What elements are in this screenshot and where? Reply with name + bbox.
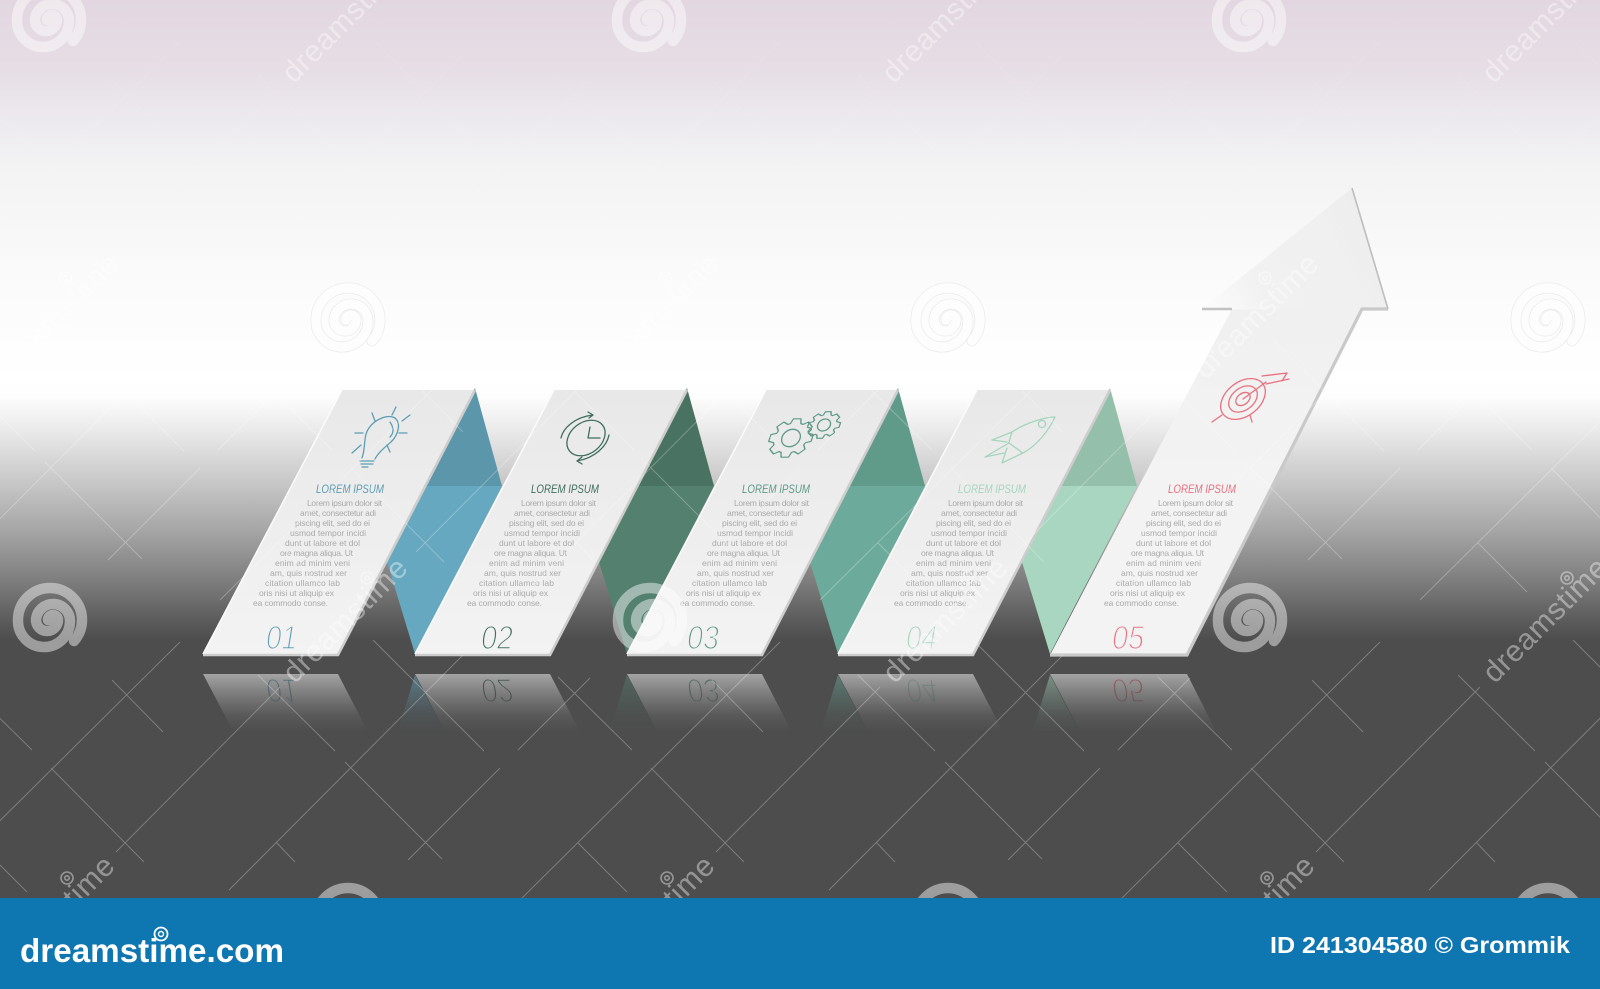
body text: ea commodo conse.: [894, 598, 969, 608]
body text: amet, consectetur adi: [1151, 508, 1227, 518]
body text: piscing elit, sed do ei: [722, 518, 797, 528]
image id and credit: ID 241304580 © Grommik: [1270, 932, 1571, 958]
body text: amet, consectetur adi: [300, 508, 376, 518]
body text: oris nisi ut aliquip ex: [1110, 588, 1186, 598]
body text: citation ullamco lab: [692, 578, 767, 588]
fold: teal: [387, 388, 502, 654]
body text: [1104, 498, 1234, 608]
body text: oris nisi ut aliquip ex: [259, 588, 335, 598]
body text: ea commodo conse.: [680, 598, 755, 608]
body text: enim ad minim veni: [275, 558, 350, 568]
heading: LOREM IPSUM: [1168, 484, 1236, 496]
body text: ea commodo conse.: [467, 598, 542, 608]
body text: citation ullamco lab: [265, 578, 340, 588]
body text: enim ad minim veni: [916, 558, 991, 568]
fold: dark green: [599, 388, 714, 654]
body text: Lorem ipsum dolor sit: [734, 498, 810, 508]
body text: ore magna aliqua. Ut: [1131, 548, 1205, 558]
body text: oris nisi ut aliquip ex: [900, 588, 976, 598]
number 01: 01: [266, 619, 297, 656]
heading: LOREM IPSUM: [531, 484, 599, 496]
icon: rocket: [985, 417, 1055, 463]
watermark overlay: dreamstime: [587, 247, 725, 385]
body text: ore magna aliqua. Ut: [921, 548, 995, 558]
watermark overlay: dreamstime: [276, 551, 414, 689]
body text: am, quis nostrud xer: [697, 568, 774, 578]
body text: oris nisi ut aliquip ex: [473, 588, 549, 598]
body text: ore magna aliqua. Ut: [494, 548, 568, 558]
reflections on the floor: 03: [687, 672, 720, 709]
body text: dunt ut labore et dol: [499, 538, 574, 548]
body text: amet, consectetur adi: [514, 508, 590, 518]
panel: step 05 arrow: [1050, 188, 1388, 656]
reflections on the floor: 05: [1112, 672, 1145, 709]
fold: mid green: [810, 388, 925, 654]
watermark overlay: dreamstime: [1187, 247, 1325, 385]
reflections on the floor: [203, 674, 1210, 720]
watermark overlay: dreamstime: [876, 551, 1014, 689]
body text: piscing elit, sed do ei: [295, 518, 370, 528]
body text: amet, consectetur adi: [941, 508, 1017, 518]
body text: Lorem ipsum dolor sit: [307, 498, 383, 508]
body text: usmod tempor incidi: [931, 528, 1007, 538]
body text: piscing elit, sed do ei: [1146, 518, 1221, 528]
body text: piscing elit, sed do ei: [509, 518, 584, 528]
body text: oris nisi ut aliquip ex: [686, 588, 762, 598]
body text: usmod tempor incidi: [290, 528, 366, 538]
watermark overlay: dreamstime: [1183, 849, 1321, 987]
heading: LOREM IPSUM: [742, 484, 810, 496]
reflections on the floor: 01: [266, 672, 297, 709]
body text: Lorem ipsum dolor sit: [1158, 498, 1234, 508]
body text: citation ullamco lab: [906, 578, 981, 588]
body text: citation ullamco lab: [1116, 578, 1191, 588]
body text: ore magna aliqua. Ut: [280, 548, 354, 558]
panel: step 04: [838, 390, 1110, 656]
icon: clock with arrows: [560, 412, 612, 464]
body text: [253, 498, 383, 608]
body text: dunt ut labore et dol: [285, 538, 360, 548]
icon: target with arrow: [1212, 370, 1289, 428]
body text: am, quis nostrud xer: [484, 568, 561, 578]
body text: Lorem ipsum dolor sit: [948, 498, 1024, 508]
heading: LOREM IPSUM: [316, 484, 384, 496]
body text: enim ad minim veni: [489, 558, 564, 568]
body text: ea commodo conse.: [253, 598, 328, 608]
body text: dunt ut labore et dol: [926, 538, 1001, 548]
body text: enim ad minim veni: [702, 558, 777, 568]
reflections on the floor: 02: [481, 672, 513, 709]
body text: dunt ut labore et dol: [712, 538, 787, 548]
panel: step 03: [627, 390, 898, 656]
footer logo: dreamstime.com: [20, 932, 284, 969]
body text: ore magna aliqua. Ut: [707, 548, 781, 558]
body text: am, quis nostrud xer: [1121, 568, 1198, 578]
body text: am, quis nostrud xer: [911, 568, 988, 578]
body text: [894, 498, 1024, 608]
body text: enim ad minim veni: [1126, 558, 1201, 568]
heading: LOREM IPSUM: [958, 484, 1026, 496]
body text: usmod tempor incidi: [717, 528, 793, 538]
icon: gears: [764, 412, 844, 457]
reflections on the floor: 04: [906, 672, 937, 709]
body text: piscing elit, sed do ei: [936, 518, 1011, 528]
number 02: 02: [481, 619, 513, 656]
number 03: 03: [687, 619, 720, 656]
body text: Lorem ipsum dolor sit: [521, 498, 597, 508]
body text: am, quis nostrud xer: [270, 568, 347, 578]
body text: usmod tempor incidi: [504, 528, 580, 538]
number 04: 04: [906, 619, 937, 656]
body text: ea commodo conse.: [1104, 598, 1179, 608]
footer bar: [0, 898, 1600, 989]
body text: usmod tempor incidi: [1141, 528, 1217, 538]
watermark overlay: dreamstime: [583, 849, 721, 987]
panel: step 02: [415, 390, 687, 656]
body text: citation ullamco lab: [479, 578, 554, 588]
body text: [680, 498, 810, 608]
body text: dunt ut labore et dol: [1136, 538, 1211, 548]
fold: mint: [1022, 388, 1137, 654]
body text: amet, consectetur adi: [727, 508, 803, 518]
icon: light bulb: [352, 407, 410, 467]
panel: step 01: [203, 390, 475, 656]
body text: [467, 498, 597, 608]
number 05: 05: [1112, 619, 1145, 656]
